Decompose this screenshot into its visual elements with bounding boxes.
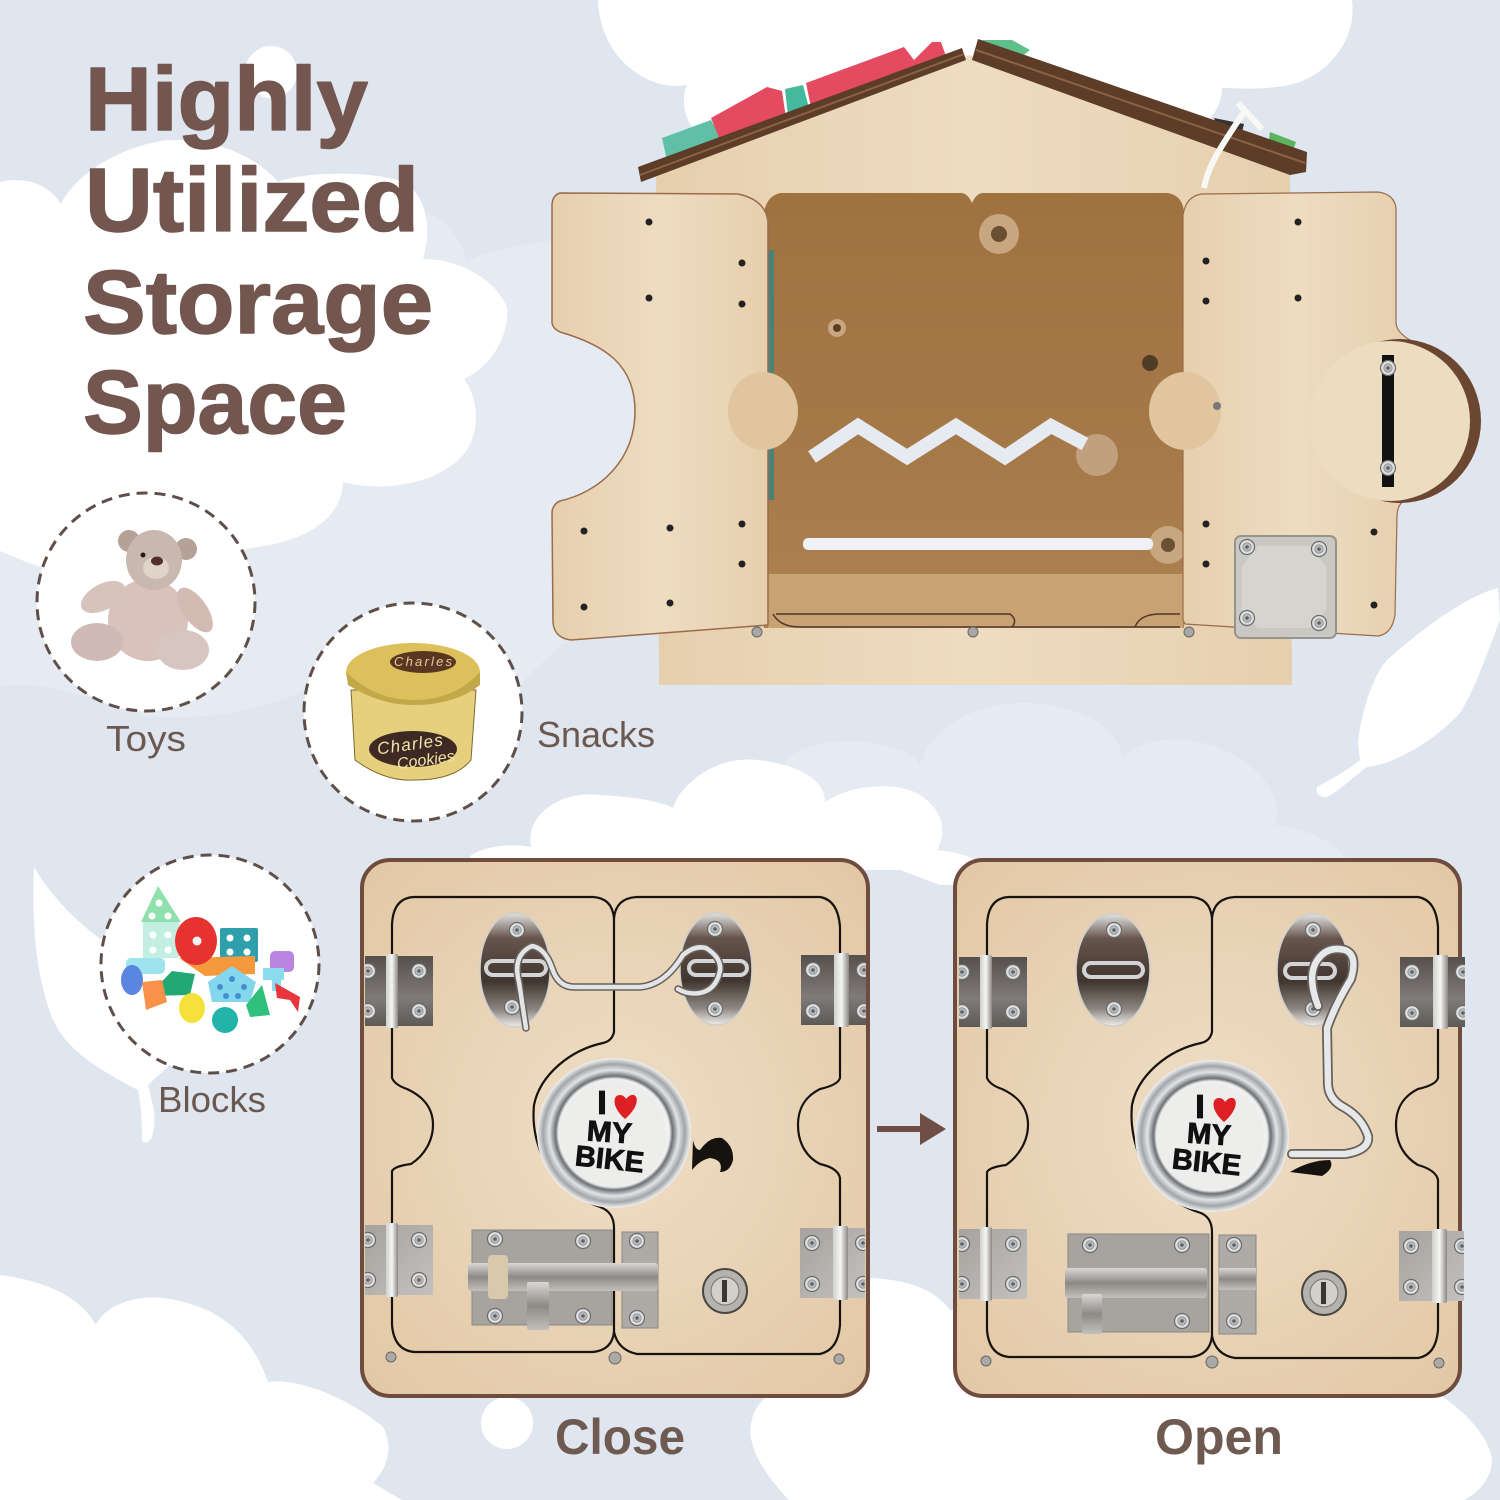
badge: snacks — [304, 603, 522, 821]
label: blocks: Blocks — [158, 1079, 266, 1120]
bell lever — [1290, 1160, 1331, 1176]
teal edge — [768, 250, 774, 500]
house back wall — [656, 55, 1292, 685]
cloud: bottom right — [750, 1278, 1492, 1500]
base screws — [752, 627, 1194, 637]
hook hanging — [1292, 949, 1368, 1154]
bell lever — [692, 1138, 733, 1172]
icon: toy blocks — [121, 886, 300, 1033]
title: Highly — [85, 50, 368, 150]
leaf: left — [33, 867, 240, 1143]
icon: cookie tin: Charles — [376, 730, 444, 759]
roof toys — [662, 40, 1296, 165]
panel: open door board — [954, 860, 1470, 1396]
barrel bolt — [1068, 1234, 1209, 1332]
cloud: top right — [598, 0, 1353, 135]
icon: cookie tin: Charles — [394, 654, 452, 669]
bell: BIKE — [574, 1140, 645, 1179]
key lock — [703, 1269, 747, 1313]
door outlines — [392, 897, 614, 1352]
bell: BIKE — [1171, 1143, 1242, 1182]
label: close: Close — [555, 1409, 685, 1465]
bell: I — [597, 1084, 607, 1121]
label: open: Open — [1155, 1409, 1283, 1465]
bell: MY — [586, 1115, 633, 1150]
title: Space — [83, 353, 347, 453]
arrow — [877, 1113, 946, 1145]
interior floor — [768, 574, 1183, 628]
label: snacks: Snacks — [537, 714, 655, 755]
hinges — [954, 955, 1027, 1029]
bell — [1135, 1060, 1289, 1212]
key lock — [1302, 1271, 1346, 1315]
label: toys: Toys — [106, 718, 186, 759]
panel: closed door board — [360, 860, 872, 1396]
barrel bolt — [472, 1230, 612, 1325]
title: Utilized — [85, 151, 419, 251]
interior — [764, 193, 1184, 628]
hook eyes — [486, 961, 546, 975]
straight slot — [803, 538, 1153, 550]
zigzag slot — [812, 426, 1085, 457]
screws inside — [828, 214, 1187, 564]
hook eyes — [1084, 963, 1143, 977]
pale cloud: middle — [785, 703, 1346, 860]
cloud: bottom left — [0, 1275, 402, 1500]
pins — [386, 1352, 844, 1364]
hook latch — [517, 946, 720, 1028]
hook plates — [480, 913, 550, 1027]
badge: toys — [37, 493, 255, 711]
metal plate — [1235, 536, 1336, 638]
coin disc — [1310, 339, 1481, 503]
house photo — [552, 39, 1481, 685]
title: Storage — [83, 253, 433, 353]
roof — [638, 39, 1307, 182]
bubble: near title — [245, 46, 297, 98]
leaf: right — [1317, 588, 1500, 797]
door outlines — [987, 897, 1212, 1357]
icon: cookie tin: Cookies — [396, 748, 456, 773]
cloud: top left — [0, 140, 507, 600]
cloud: middle — [470, 759, 981, 885]
cord — [1204, 103, 1262, 188]
bell: MY — [1186, 1118, 1232, 1152]
small circle bubble — [481, 1397, 533, 1449]
right door — [1149, 192, 1410, 636]
hinges — [360, 954, 433, 1028]
bell — [537, 1058, 691, 1208]
left door — [552, 193, 798, 640]
bell: I — [1195, 1088, 1205, 1125]
pins — [981, 1356, 1444, 1368]
pale cloud: behind left badges — [0, 214, 640, 717]
icon: teddy bear — [71, 530, 220, 670]
badge: blocks — [101, 855, 319, 1073]
hook plates — [1076, 914, 1150, 1026]
title — [83, 50, 433, 453]
icon: cookie tin — [346, 643, 480, 780]
